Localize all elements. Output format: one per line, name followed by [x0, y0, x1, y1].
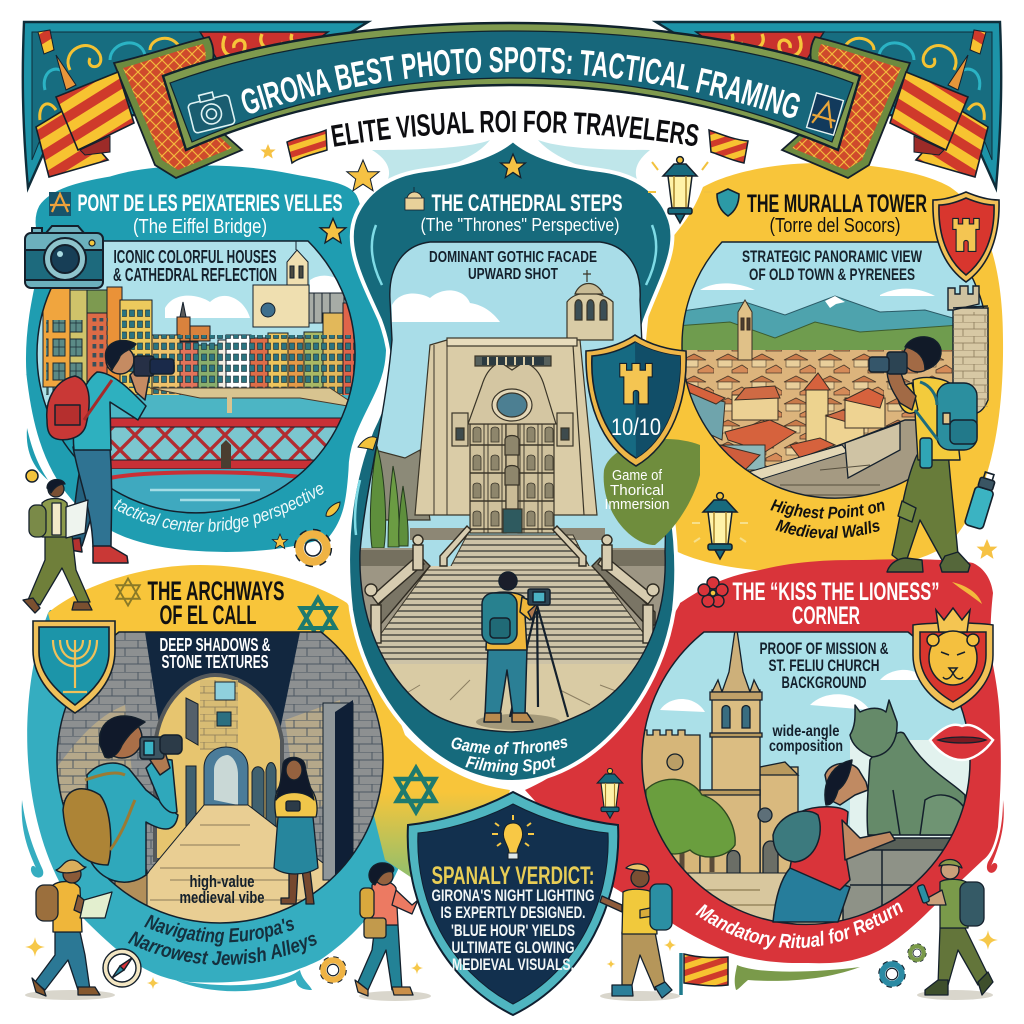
- header corner ornament right: [656, 22, 1001, 188]
- callout text: highest point: Medieval Walls: [775, 520, 880, 539]
- curl right: [987, 800, 1004, 873]
- panel heading: OF EL CALL: [160, 600, 256, 630]
- lantern centre: [597, 768, 623, 818]
- text block: medieval vibe: high-value: [190, 872, 254, 891]
- green gear: [909, 945, 925, 961]
- verdict body: [432, 886, 594, 974]
- swoosh: [175, 970, 312, 991]
- icon: red shield castle: [933, 192, 999, 282]
- panel: Pont de les Peixateries Velles: [24, 166, 386, 568]
- lantern top: [648, 157, 712, 223]
- text block: iconic houses: [113, 247, 277, 285]
- walker with hat and map: [25, 860, 115, 1000]
- star right: [977, 539, 997, 559]
- text block: iconic houses: ICONIC COLORFUL HOUSES: [114, 247, 276, 267]
- star of David centre: [397, 768, 435, 812]
- bubble text: Thorical: [610, 482, 664, 499]
- text block: gothic facade: DOMINANT GOTHIC FACADE: [429, 249, 597, 266]
- panel: Muralla Tower: [646, 163, 1004, 570]
- callout text: mandatory ritual: Mandatory Ritual for Return: [695, 902, 903, 950]
- panel heading: THE MURALLA TOWER: [747, 190, 927, 218]
- small senyera flag left: [287, 130, 327, 163]
- swoosh left curl: [22, 800, 43, 878]
- panel heading: [732, 578, 940, 630]
- panel: Kiss the Lioness: [525, 559, 1004, 964]
- panel heading: THE ARCHWAYS: [148, 576, 284, 606]
- callout text: filming spot: Game of Thrones: [452, 738, 568, 754]
- cyan highlights: [355, 225, 656, 535]
- icon: light bulb: [492, 815, 534, 859]
- droplet: [326, 502, 340, 516]
- star top: [501, 154, 525, 178]
- small star: [272, 534, 288, 548]
- gear icon: [298, 533, 328, 563]
- panel heading: [148, 576, 284, 630]
- star: [320, 218, 346, 243]
- photo: colourful houses: [38, 242, 354, 512]
- rating shield 10/10: [586, 335, 686, 466]
- callout text: navigating: Navigating Europa's: [144, 914, 294, 946]
- icon: small shield: [717, 189, 739, 216]
- callout text: highest point: Highest Point on: [770, 499, 885, 519]
- swoosh olive: [735, 965, 860, 990]
- hiker with yellow shirt: [600, 864, 680, 1001]
- text block: wide-angle: composition: [769, 738, 843, 755]
- walking woman: [355, 863, 431, 1001]
- text block: deep shadows: STONE TEXTURES: [162, 652, 268, 672]
- panel heading: CORNER: [792, 602, 860, 630]
- icon: mini cathedral: [405, 187, 424, 210]
- icon: lion shield: [913, 608, 993, 710]
- verdict body: IS EXPERTLY DESIGNED.: [440, 903, 586, 922]
- verdict body: 'BLUE HOUR' YIELDS: [451, 921, 575, 940]
- panel heading: [78, 190, 342, 238]
- callout text: tactical perspective: tactical center bridge perspective: [114, 485, 324, 532]
- photo: cathedral facade: [355, 238, 680, 739]
- icon: camera: [186, 88, 235, 134]
- bubble text: [604, 467, 670, 513]
- Catalan flag: [681, 953, 728, 995]
- text block: proof of mission: ST. FELIU CHURCH: [768, 656, 880, 675]
- title banner: [162, 22, 862, 152]
- verdict text: SPANALY VERDICT:: [432, 862, 594, 890]
- callout text: navigating: [128, 914, 317, 966]
- sparkles: [25, 930, 998, 989]
- text block: gothic facade: UPWARD SHOT: [468, 266, 558, 283]
- decorative stars: [260, 144, 379, 191]
- gear icon bottom left: [322, 959, 344, 981]
- icon: bridge: [807, 93, 843, 135]
- dot: [26, 470, 38, 482]
- gold tip: [358, 437, 377, 450]
- bubble text: Game of: [612, 467, 663, 484]
- callout text: highest point: [770, 499, 885, 539]
- text block: deep shadows: DEEP SHADOWS &: [160, 635, 270, 655]
- panel heading: THE CATHEDRAL STEPS: [432, 190, 622, 217]
- walker with map, top left: [23, 479, 92, 613]
- subtitle: ELITE VISUAL ROI FOR TRAVELERS: [331, 110, 699, 147]
- lantern lower: [692, 493, 748, 559]
- photo: St Feliu and lioness: [642, 632, 970, 924]
- panel: Cathedral Steps: [348, 142, 700, 780]
- photographer with tripod: [482, 572, 568, 722]
- text block: panoramic view: STRATEGIC PANORAMIC VIEW: [742, 247, 923, 266]
- verdict body: GIRONA'S NIGHT LIGHTING: [432, 886, 594, 905]
- icon: compass: [103, 949, 141, 987]
- verdict body: MEDIEVAL VISUALS.: [452, 955, 574, 974]
- blue gear: [881, 963, 903, 985]
- yellow flourish: [952, 582, 982, 604]
- verdict shield: [408, 792, 618, 1015]
- callout text: filming spot: [452, 738, 568, 776]
- text block: proof of mission: [760, 639, 888, 692]
- water bottle: [964, 471, 999, 530]
- photographer in alley: [63, 716, 182, 882]
- icon: star of David small: [116, 578, 140, 606]
- panel heading: (The Eiffel Bridge): [133, 216, 267, 238]
- text block: gothic facade: [429, 249, 597, 283]
- icon: menorah shield: [33, 621, 115, 713]
- verdict body: ULTIMATE GLOWING: [452, 938, 574, 957]
- text block: proof of mission: BACKGROUND: [782, 673, 866, 692]
- panel heading: (Torre del Socors): [770, 215, 900, 237]
- panel heading: PONT DE LES PEIXATERIES VELLES: [78, 190, 342, 217]
- tower: [948, 286, 988, 425]
- text block: wide-angle: [769, 723, 843, 755]
- text block: iconic houses: & CATHEDRAL REFLECTION: [113, 265, 277, 285]
- icon: flower: [698, 577, 728, 607]
- text block: proof of mission: PROOF OF MISSION &: [760, 639, 888, 658]
- photographer on bridge: [47, 341, 174, 563]
- title text: GIRONA BEST PHOTO SPOTS: TACTICAL FRAMING: [242, 47, 800, 118]
- callout text: filming spot: Filming Spot: [465, 756, 556, 776]
- wisps above cathedral panel: [372, 140, 650, 185]
- photographer on wall: [869, 337, 977, 572]
- icon: star of David large: [301, 598, 335, 638]
- rating shield 10/10: 10/10: [611, 414, 661, 441]
- small senyera flag right: [709, 130, 748, 163]
- panel heading: [420, 190, 622, 235]
- green bubble: [604, 439, 700, 545]
- icon: camera: [25, 226, 103, 288]
- hiker in green: [917, 860, 993, 1000]
- swoosh left: [27, 428, 48, 480]
- photo: panorama: [682, 242, 982, 498]
- panel heading: (The "Thrones" Perspective): [420, 215, 620, 235]
- panel heading: [747, 190, 927, 237]
- panel: Archways of El Call: [22, 565, 510, 992]
- bubble text: Immersion: [604, 496, 670, 513]
- icon: small bridge: [49, 192, 71, 216]
- woman kissing the lioness: [773, 760, 895, 922]
- text block: deep shadows: [160, 635, 270, 672]
- photo: alley: [50, 625, 390, 930]
- text block: medieval vibe: [180, 872, 264, 907]
- text block: panoramic view: [742, 247, 923, 284]
- text block: wide-angle: wide-angle: [772, 723, 840, 740]
- icon: lips: [930, 725, 993, 760]
- header corner ornament left: [23, 22, 368, 188]
- callout text: navigating: Narrowest Jewish Alleys: [128, 931, 317, 966]
- text block: medieval vibe: medieval vibe: [180, 888, 264, 907]
- text block: panoramic view: OF OLD TOWN & PYRENEES: [749, 265, 915, 284]
- woman in alley: [274, 757, 318, 904]
